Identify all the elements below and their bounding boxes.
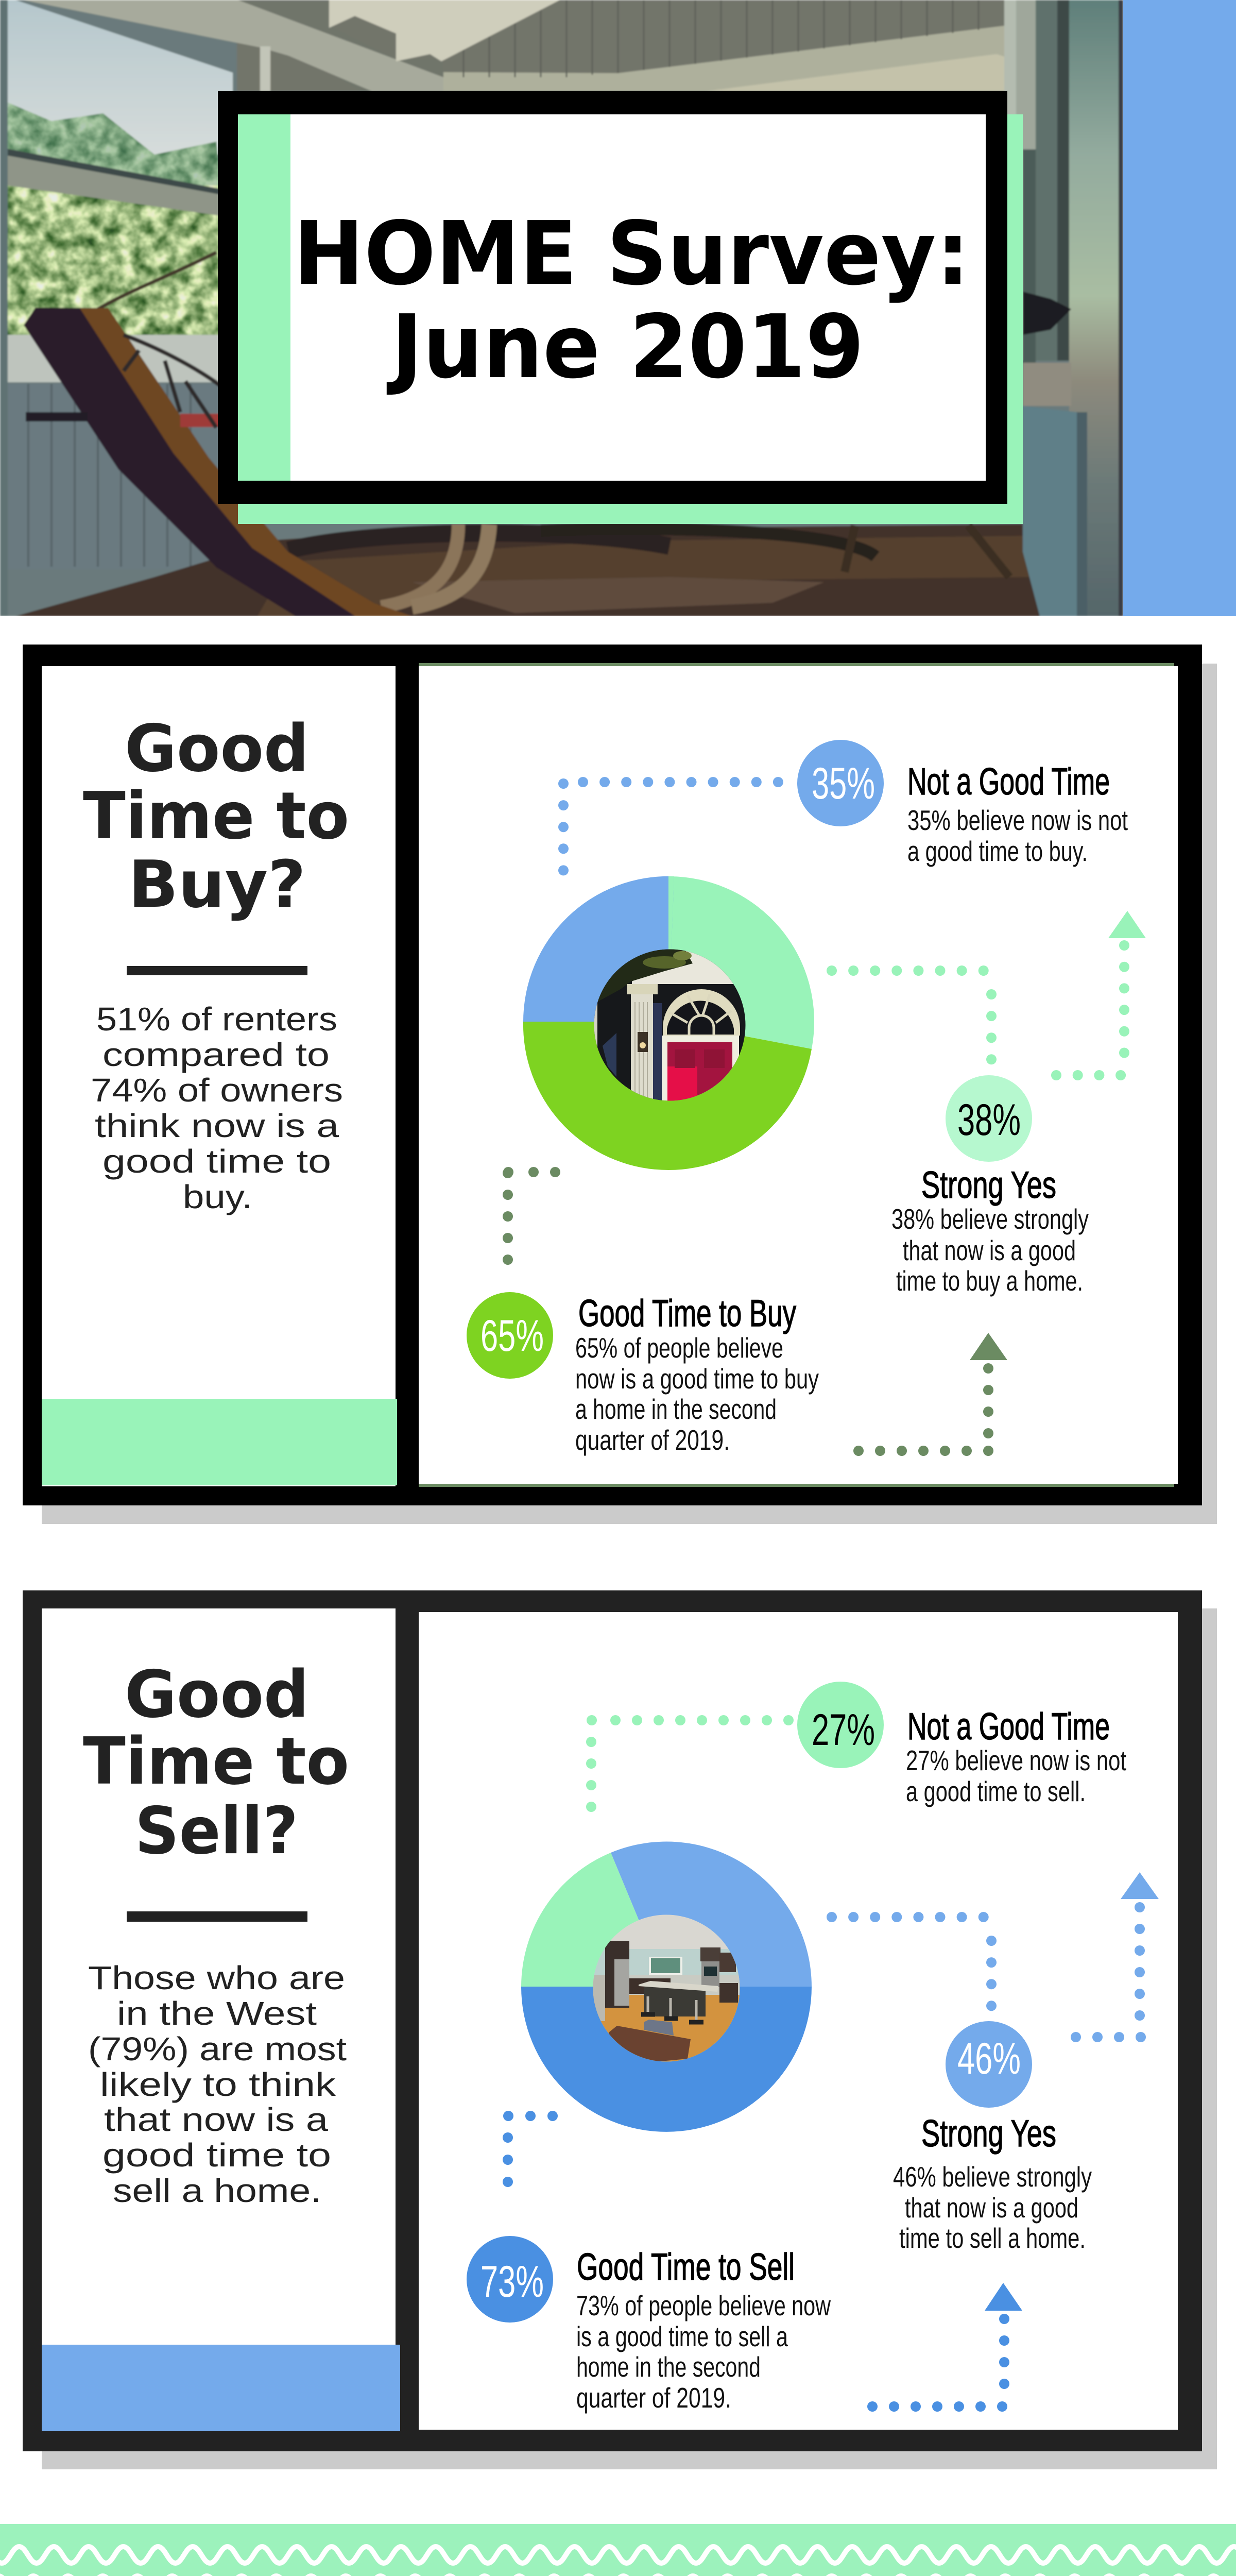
sidebar heading: Good Time to Buy?: Buy?	[128, 846, 306, 922]
stat: 27% not a good time: 27% believe now is not	[906, 1744, 1126, 1776]
donut chart	[523, 876, 814, 1170]
dotted connector: good time to buy	[503, 1167, 1007, 1451]
sidebar heading: Good Time to Sell?: Sell?	[135, 1793, 298, 1869]
sidebar text: Those who are	[88, 1959, 345, 1996]
stat: 27% not a good time: Not a Good Time	[907, 1706, 1110, 1748]
stat: 73% good time to sell: 73% of people believe now	[576, 2290, 831, 2321]
stat: 38% strong yes	[891, 1075, 1089, 1297]
stat: 73% good time to sell: is a good time to sell a	[576, 2320, 788, 2352]
arrow: mint	[1108, 911, 1146, 938]
arrow: dark blue	[985, 2283, 1022, 2311]
stat: 35% not a good time: 35% believe now is not	[907, 804, 1128, 836]
sidebar heading: Good Time to Sell?: Good	[125, 1656, 309, 1732]
sidebar text: likely to think	[100, 2066, 336, 2103]
stat: 65% good time to buy	[467, 1292, 819, 1456]
sidebar heading: Good Time to Sell?	[83, 1656, 349, 1869]
donut chart	[521, 1841, 812, 2132]
sidebar heading: Good Time to Sell?: Time to	[83, 1723, 349, 1799]
stat: 38% strong yes: 38% believe strongly	[891, 1203, 1089, 1235]
stat: 46% strong yes: Strong Yes	[921, 2113, 1056, 2155]
dotted connector: strong yes	[832, 1872, 1159, 2037]
sidebar text	[88, 1959, 347, 2209]
title text: June 2019	[386, 296, 864, 398]
sidebar text: 51% of renters	[96, 1001, 337, 1038]
stat: 35% not a good time: 35%	[812, 759, 875, 808]
sidebar text: compared to	[102, 1036, 330, 1073]
dotted connector: strong yes	[832, 911, 1146, 1075]
door photo	[592, 948, 752, 1104]
sidebar blue block	[42, 2345, 400, 2431]
hero right blue strip	[1123, 0, 1236, 616]
stat: 73% good time to sell	[467, 2236, 831, 2414]
stat: 38% strong yes: time to buy a home.	[896, 1265, 1083, 1297]
sidebar text: think now is a	[95, 1107, 339, 1144]
sidebar text: (79%) are most	[88, 2030, 347, 2067]
stat: 65% good time to buy: 65% of people believe	[575, 1332, 783, 1364]
stat: 46% strong yes: 46%	[957, 2034, 1021, 2083]
stat: 35% not a good time: a good time to buy.	[907, 835, 1088, 867]
dotted connector: not a good time	[591, 1720, 789, 1808]
sidebar text: 74% of owners	[91, 1072, 343, 1109]
stat: 46% strong yes: 46% believe strongly	[893, 2161, 1092, 2193]
stat: 27% not a good time: 27%	[812, 1705, 875, 1755]
kitchen photo	[592, 1914, 742, 2064]
stat: 27% not a good time	[797, 1682, 1126, 1807]
sidebar heading: Good Time to Buy?: Time to	[83, 778, 349, 854]
arrow: light blue	[1121, 1872, 1159, 1899]
sidebar text: sell a home.	[113, 2172, 321, 2209]
dotted connector: good time to sell	[508, 2116, 1022, 2406]
stat: 38% strong yes: that now is a good	[903, 1234, 1076, 1266]
sidebar heading: Good Time to Buy?	[83, 710, 349, 922]
sidebar text: buy.	[183, 1178, 252, 1215]
sidebar text: that now is a	[104, 2101, 328, 2138]
stat: 35% not a good time: Not a Good Time	[907, 761, 1110, 803]
sidebar mint block	[42, 1399, 397, 1485]
stat: 35% not a good time	[797, 740, 1128, 867]
panel: good time to buy	[23, 645, 1217, 1524]
dotted connector: not a good time	[563, 782, 779, 871]
sidebar text	[91, 1001, 343, 1215]
title card	[218, 91, 1023, 524]
stat: 46% strong yes	[893, 2021, 1092, 2254]
sidebar heading: Good Time to Buy?: Good	[125, 710, 309, 786]
stat: 73% good time to sell: quarter of 2019.	[576, 2382, 731, 2414]
stat: 46% strong yes: time to sell a home.	[899, 2222, 1086, 2254]
arrow: dark green	[970, 1333, 1007, 1360]
stat: 65% good time to buy: 65%	[480, 1311, 544, 1361]
stat: 73% good time to sell: Good Time to Sell	[577, 2246, 795, 2288]
sidebar text: good time to	[102, 1143, 331, 1180]
stat: 65% good time to buy: a home in the second	[575, 1393, 777, 1425]
stat: 65% good time to buy: now is a good time to buy	[575, 1363, 819, 1395]
stat: 27% not a good time: a good time to sell.	[906, 1775, 1086, 1807]
stat: 73% good time to sell: home in the second	[576, 2351, 761, 2383]
hero section	[0, 0, 1236, 616]
title text: HOME Survey:	[294, 203, 970, 305]
hero photo: porch with hammock stand	[0, 0, 1123, 616]
stat: 65% good time to buy: quarter of 2019.	[575, 1424, 730, 1456]
stat: 46% strong yes: that now is a good	[905, 2192, 1078, 2224]
stat: 65% good time to buy: Good Time to Buy	[578, 1293, 796, 1334]
title text	[294, 203, 970, 398]
stat: 38% strong yes: 38%	[957, 1095, 1021, 1145]
sidebar text: good time to	[102, 2137, 331, 2174]
sidebar text: in the West	[117, 1995, 317, 2032]
panel: good time to sell	[23, 1590, 1217, 2469]
wave divider band	[0, 2524, 1236, 2576]
stat: 38% strong yes: Strong Yes	[921, 1164, 1056, 1206]
stat: 73% good time to sell: 73%	[480, 2257, 544, 2307]
